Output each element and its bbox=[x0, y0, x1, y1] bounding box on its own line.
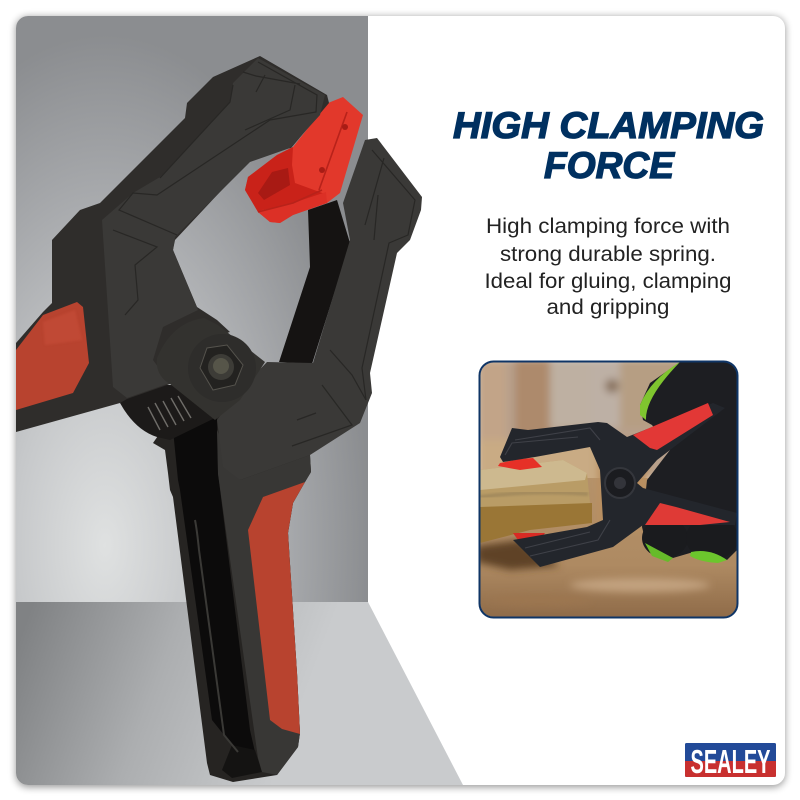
bench shading bbox=[480, 460, 709, 596]
panel: product photo bbox=[16, 16, 463, 785]
blurred workshop background bbox=[480, 362, 735, 478]
lower red grip bbox=[248, 482, 305, 734]
red clamping pad bbox=[245, 97, 363, 223]
photo border bbox=[480, 362, 738, 618]
lower jaw inner recess bbox=[279, 200, 350, 364]
body text: Ideal for gluing, clamping bbox=[484, 269, 732, 293]
photo clamp grooves bbox=[505, 428, 610, 556]
lower handle cavity bbox=[172, 417, 255, 752]
cavity rib bbox=[195, 520, 238, 752]
hex nut bbox=[200, 345, 243, 390]
inset photo: clamp in use bbox=[476, 358, 741, 623]
lower jaw front face bbox=[217, 138, 422, 480]
lower jaw grooves bbox=[292, 150, 415, 446]
photo clamp pivot bbox=[605, 468, 635, 498]
photo clamp upper red grip bbox=[633, 403, 713, 450]
red jaw pads bbox=[498, 458, 542, 470]
upper jaw silhouette bbox=[16, 56, 329, 432]
cavity floor bbox=[222, 745, 262, 778]
upper grip highlight bbox=[45, 313, 80, 343]
heading: HIGH CLAMPING bbox=[453, 105, 764, 146]
spring bbox=[120, 385, 217, 440]
small clamp bbox=[500, 403, 737, 567]
upper jaw grooves bbox=[113, 62, 317, 315]
upper red grip bbox=[16, 302, 89, 410]
body text: strong durable spring. bbox=[500, 242, 716, 266]
pivot collar bbox=[158, 332, 265, 420]
photo clamp lower red grip bbox=[645, 503, 730, 525]
floor bbox=[16, 602, 463, 785]
heading: FORCE bbox=[544, 145, 675, 186]
clamp bbox=[16, 56, 422, 782]
body text: High clamping force with bbox=[486, 214, 730, 238]
lower handle silhouette bbox=[153, 400, 311, 782]
body text bbox=[484, 214, 732, 319]
timber block bbox=[480, 460, 592, 543]
upper jaw front face bbox=[102, 58, 325, 398]
pivot hub bbox=[230, 335, 254, 393]
heading bbox=[453, 105, 764, 186]
lower handle front bbox=[217, 430, 311, 775]
body text: and gripping bbox=[546, 295, 670, 319]
workbench bbox=[476, 478, 741, 623]
glove bbox=[640, 362, 738, 563]
back wall bbox=[16, 16, 368, 602]
